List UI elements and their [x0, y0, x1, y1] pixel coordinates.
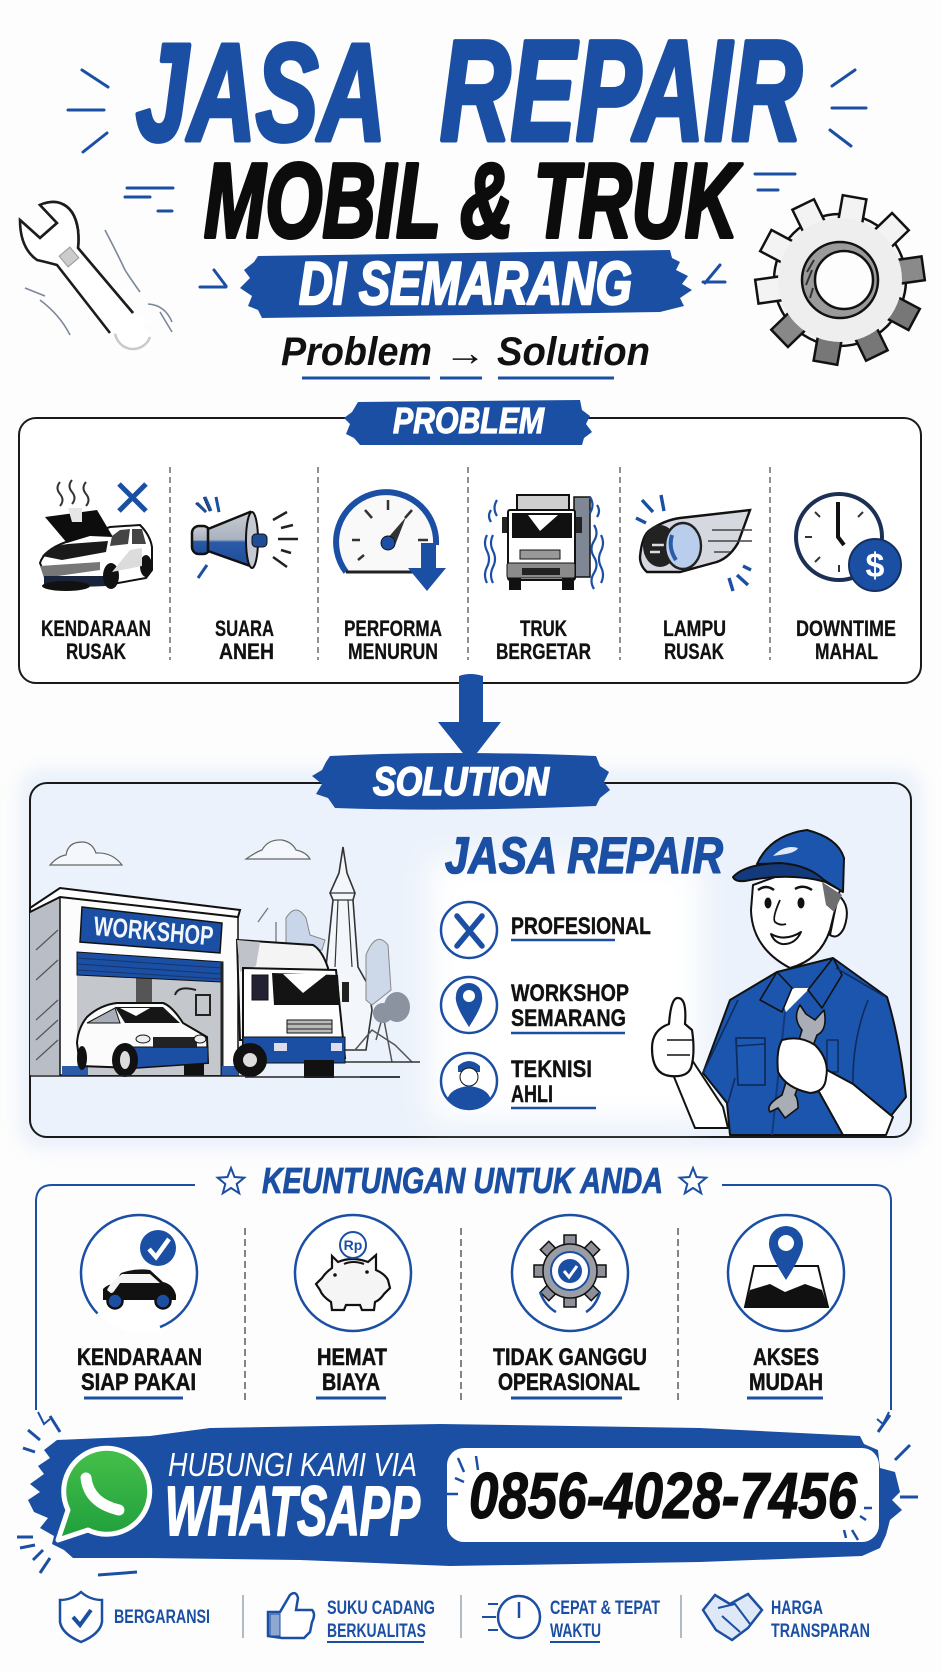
benefit: hemat biaya: HEMAT [317, 1344, 387, 1371]
benefit: kendaraan siap pakai [77, 1215, 202, 1398]
item: kendaraan rusak [40, 480, 152, 664]
badge: cepat dan tepat waktu [482, 1596, 660, 1642]
title: Jasa Repair: JASA [136, 16, 386, 170]
sign: workshop [80, 907, 222, 953]
item: lampu rusak [636, 495, 752, 664]
badge: harga transparan [703, 1594, 870, 1642]
banner: whatsapp call to action [17, 1415, 918, 1575]
badge: suku cadang berkualitas: SUKU CADANG [327, 1598, 435, 1619]
item: truk bergetar [485, 495, 603, 664]
item: performa menurun: PERFORMA [344, 616, 442, 641]
feature: workshop semarang [441, 977, 629, 1033]
badge: bergaransi: BERGARANSI [114, 1607, 210, 1628]
footer: trust badges [60, 1592, 870, 1642]
item: performa menurun [336, 492, 446, 664]
panel: benefits [36, 1160, 891, 1424]
item: truk bergetar: TRUK [520, 616, 567, 641]
badge: suku cadang berkualitas [268, 1593, 435, 1642]
panel: solution [18, 753, 923, 1150]
benefit: hemat biaya: BIAYA [322, 1369, 380, 1396]
illustration: workshop building [30, 888, 240, 1076]
arrow: problem to solution [438, 674, 501, 762]
heading: Jasa Repair: JASA REPAIR [445, 827, 723, 884]
item: downtime mahal: DOWNTIME [796, 616, 896, 641]
illustration: car [77, 1003, 208, 1077]
item: suara aneh: SUARA [215, 616, 274, 641]
tagline: Problem to Solution [281, 330, 650, 378]
tagline: Problem to Solution: Problem [281, 330, 432, 374]
item: lampu rusak: LAMPU [663, 616, 726, 641]
item: suara aneh [192, 497, 298, 664]
feature: profesional [441, 902, 651, 958]
badge: bergaransi [60, 1592, 210, 1642]
badge: problem [344, 400, 592, 445]
illustration: truck [233, 940, 349, 1078]
badge: harga transparan: HARGA [771, 1598, 823, 1619]
item: kendaraan rusak: RUSAK [66, 639, 126, 664]
benefit: hemat biaya [295, 1215, 411, 1398]
badge: cepat dan tepat waktu: WAKTU [550, 1621, 601, 1642]
feature: teknisi ahli [441, 1053, 596, 1109]
benefit: kendaraan siap pakai: KENDARAAN [77, 1344, 202, 1371]
badge: suku cadang berkualitas: BERKUALITAS [327, 1621, 426, 1642]
illustration: tower and city [258, 847, 420, 1077]
badge: harga transparan: TRANSPARAN [771, 1621, 870, 1642]
illustration: clouds [50, 840, 310, 865]
badge: cepat dan tepat waktu: CEPAT & TEPAT [550, 1598, 660, 1619]
icon: gear [755, 195, 925, 365]
feature: teknisi ahli: AHLI [511, 1081, 553, 1108]
tagline: Problem to Solution: → [444, 332, 486, 373]
benefit: kendaraan siap pakai: SIAP PAKAI [81, 1369, 196, 1396]
benefit: tidak ganggu operasional [493, 1215, 647, 1398]
holding arm [778, 1038, 893, 1135]
box: phone number [444, 1448, 879, 1542]
sign: workshop: WORKSHOP [92, 911, 215, 951]
icon: wrench [20, 202, 172, 349]
wrench [769, 1005, 825, 1118]
benefit: tidak ganggu operasional: OPERASIONAL [498, 1369, 640, 1396]
shirt [703, 958, 906, 1135]
badge: problem: PROBLEM [393, 400, 545, 441]
badge: solution [312, 753, 610, 810]
illustration: mechanic [652, 830, 906, 1135]
icon: whatsapp [58, 1448, 150, 1540]
tagline: Problem to Solution: Solution [497, 330, 650, 374]
text: hubungi kami via: HUBUNGI KAMI VIA [168, 1446, 417, 1483]
head [751, 868, 847, 968]
panel: problem [19, 400, 921, 683]
decorative rays around title [68, 70, 866, 287]
benefit: hemat biaya: Rp [344, 1237, 362, 1253]
item: suara aneh: ANEH [219, 639, 274, 664]
benefit: akses mudah: MUDAH [749, 1369, 823, 1396]
feature: teknisi ahli: TEKNISI [511, 1056, 592, 1083]
item: performa menurun: MENURUN [348, 639, 438, 664]
item: downtime mahal [796, 494, 901, 664]
title: Jasa Repair [136, 12, 802, 171]
item: truk bergetar: BERGETAR [496, 639, 591, 664]
text: whatsapp: WHATSAPP [165, 1472, 420, 1550]
benefit: akses mudah: AKSES [753, 1344, 819, 1371]
item: lampu rusak: RUSAK [664, 639, 724, 664]
cap [733, 830, 844, 892]
banner: Di Semarang: DI SEMARANG [299, 250, 632, 317]
item: kendaraan rusak: KENDARAAN [41, 616, 151, 641]
item: downtime mahal: MAHAL [815, 639, 878, 664]
feature: workshop semarang: SEMARANG [511, 1005, 626, 1032]
benefit: tidak ganggu operasional: TIDAK GANGGU [493, 1344, 647, 1371]
thumbs-up arm [652, 998, 728, 1128]
heading: keuntungan untuk anda: KEUNTUNGAN UNTUK ANDA [262, 1160, 663, 1201]
feature: workshop semarang: WORKSHOP [511, 980, 629, 1007]
item: downtime mahal: $ [866, 547, 885, 585]
benefit: akses mudah [728, 1215, 844, 1398]
badge: solution: SOLUTION [373, 760, 550, 804]
box: phone number: 0856-4028-7456 [469, 1459, 858, 1532]
feature: profesional: PROFESIONAL [511, 913, 651, 940]
